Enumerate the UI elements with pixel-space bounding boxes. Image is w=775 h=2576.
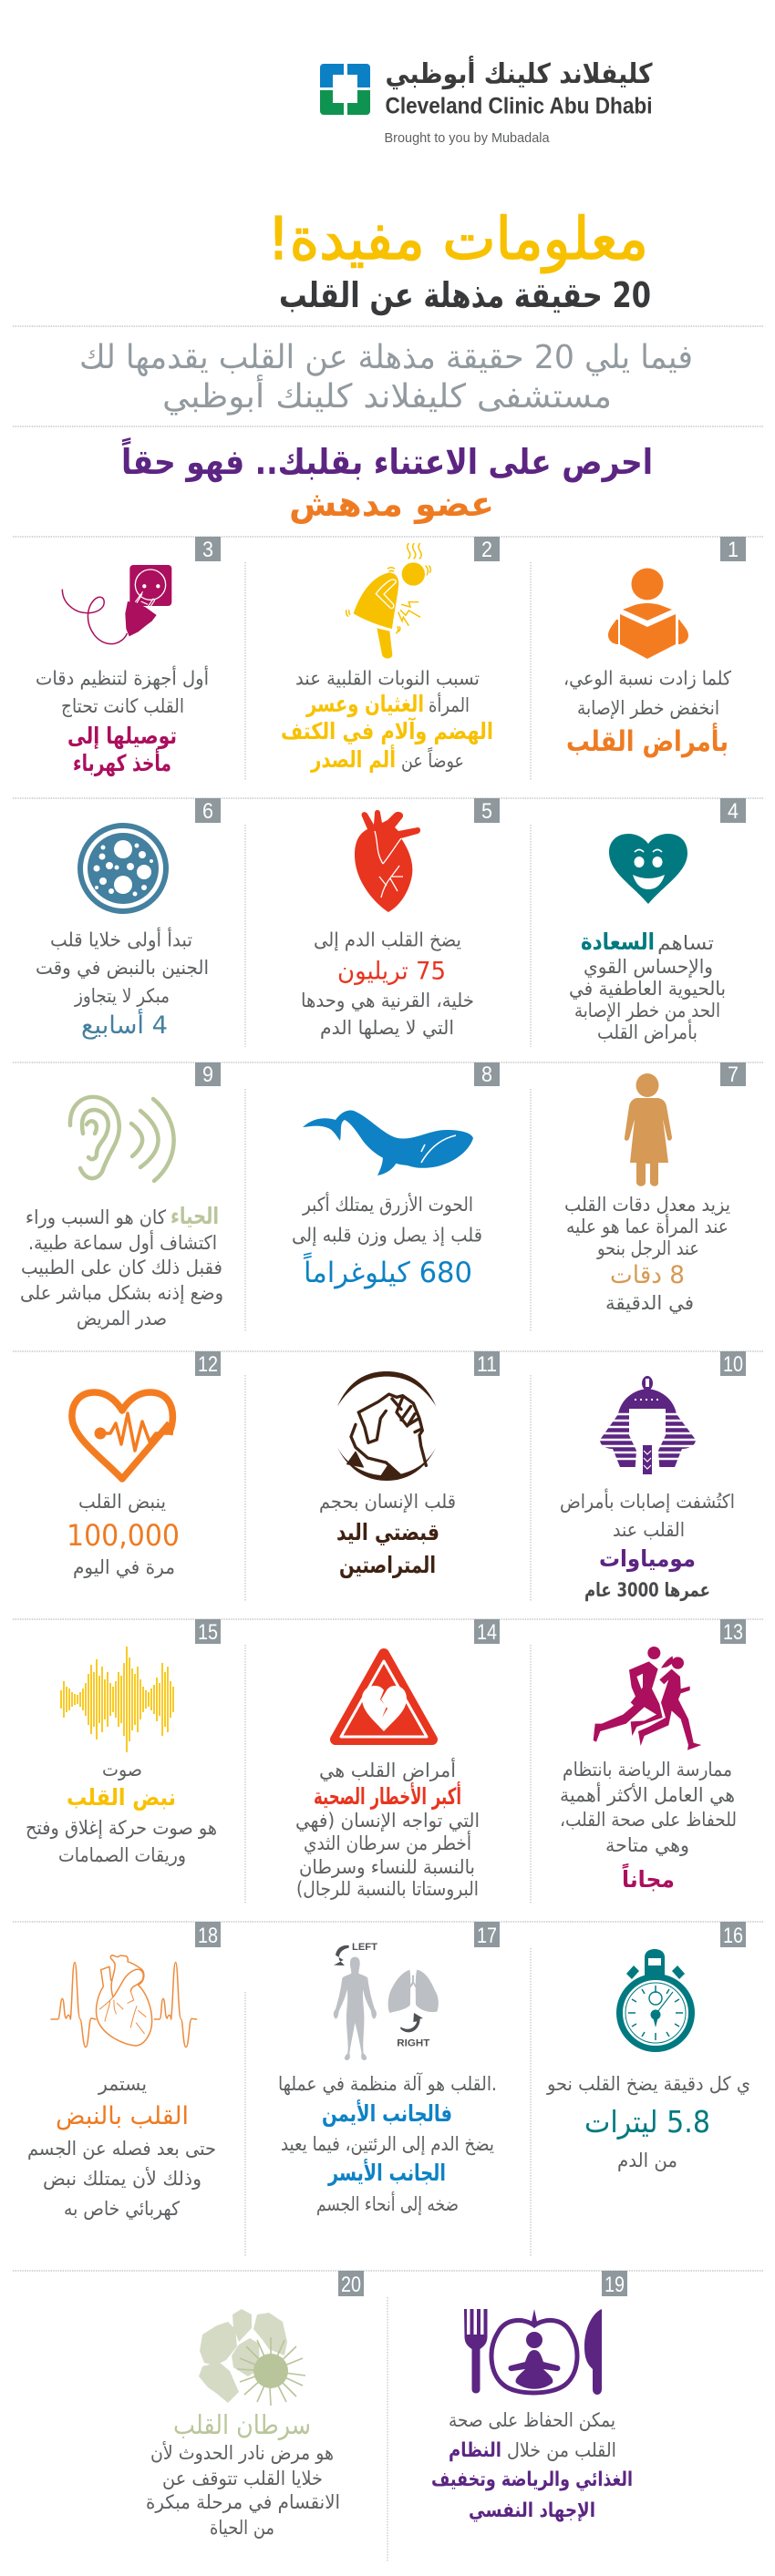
fact text: عمرها 3000 عام [584,1579,710,1601]
fact text [36,665,209,777]
number badge 7 [720,1062,746,1087]
fact text: السعادة [581,929,655,955]
icon: clasped fists [337,1371,436,1481]
fact text: فقبل ذلك كان على الطبيب [21,1257,222,1278]
number badge 5 [474,798,500,824]
icon: person reading [608,569,688,659]
fact text [560,1488,735,1601]
subtitle: 20 حقيقة مذهلة عن القلب [279,275,651,315]
number badge 4: 4 [728,799,739,824]
logo: Cleveland Clinic Abu Dhabi [320,56,653,146]
fact text: 100,000 [67,1518,180,1553]
icon: blue whale [303,1111,473,1175]
fact text: الجانب الأيسر [326,2159,446,2187]
fact text: مأخذ كهرباء [73,748,171,777]
headline: take care of your heart: احرص على الاعتناء بقلبك.. فهو حقاً [121,437,653,482]
intro text [79,339,693,416]
fact text: توصيلها إلى [67,723,177,750]
fact text: الانقسام في مرحلة مبكرة [146,2491,340,2513]
fact text: القلب كانت تحتاج [61,695,184,718]
panel: fact 14 [295,1619,500,1900]
logo English name: Cleveland Clinic Abu Dhabi [385,93,653,118]
fact text: للحفاظ على صحة القلب، [560,1809,737,1831]
number badge 11: 11 [477,1352,497,1377]
icon: body and lungs with left and right arrows [334,1942,439,2060]
number badge 3 [195,537,221,562]
fact text: النظام [449,2439,501,2462]
fact text: وذلك لأن يمتلك نبض [43,2167,202,2190]
fact text: يضخ الدم إلى الرئتين، فيما يعيد [281,2133,494,2156]
fact text [281,667,493,773]
fact text [278,2072,497,2216]
fact text: 8 دقات [610,1261,685,1289]
fact text [146,2409,340,2539]
number badge 16: 16 [723,1924,743,1948]
panel: fact 9 [20,1062,223,1329]
panel: fact 11 [319,1351,500,1579]
icon: ear with sound waves [70,1097,174,1181]
fact text: القلب بالنبض [56,2102,189,2130]
fact text: عند الرجل بنحو [596,1237,699,1259]
label: right: RIGHT [397,2038,429,2049]
icon: heart with pulse [72,1392,173,1479]
fact text [319,1491,456,1579]
panel: fact 7 [564,1062,746,1314]
fact text: ي كل دقيقة يضخ القلب نحو [546,2073,750,2095]
number badge 10: 10 [723,1352,743,1377]
fact text [569,929,726,1043]
fact text: خلايا القلب تتوقف عن [162,2468,323,2489]
fact text: الغذائي والرياضة وتخفيف [431,2468,633,2491]
fact text: ينبض القلب [78,1491,166,1513]
fact text: 5.8 ليترات [584,2104,710,2140]
fact text: الغثيان وعسر [305,691,424,718]
fact text: مبكر لا يتجاوز [74,985,170,1007]
number badge 1: 1 [728,538,739,562]
fact text: وريقات الصمامات [58,1844,186,1866]
fact text: بأمراض القلب [566,723,728,758]
fact text [67,1491,180,1578]
number badge 2 [474,537,500,562]
fact text: قبضتي اليد [336,1519,439,1545]
number badge 8 [474,1062,500,1087]
number badge 18: 18 [198,1924,218,1948]
fact text: اكتُشفت إصابات بأمراض [560,1488,735,1514]
fact text: الهضم وآلام في الكتف [281,717,493,745]
panel: fact 18 [27,1922,221,2220]
fact text: تساهم [657,932,714,955]
icon: line heart with ECG [51,1955,197,2047]
icon: embryo cells [80,826,166,911]
intro text: فيما يلي 20 حقيقة مذهلة عن القلب يقدمها لك [79,339,693,376]
icon: woman silhouette [625,1073,672,1186]
icon: logo cross mark [320,64,370,115]
fact text: صدر المريض [77,1308,167,1329]
icon: woman bent in pain [346,543,430,659]
number badge 19: 19 [604,2273,625,2297]
fact text: القلب هو آلة منظمة في عملها. [278,2072,497,2095]
fact text: القلب من خلال [507,2439,616,2461]
fact text: صوت [102,1759,142,1781]
number badge 7: 7 [728,1062,739,1087]
headline: amazing organ: عضو مدهش [289,484,494,524]
number badge 15: 15 [198,1620,218,1645]
icon: pharaoh mummy mask [597,1376,698,1476]
fact text: مجاناً [622,1863,675,1893]
number badge 6 [195,798,221,824]
icon: warning triangle with broken heart [336,1654,432,1740]
fact text: حتى بعد فصله عن الجسم [27,2138,216,2160]
title: معلومات مفيدة! [267,206,648,273]
fact text: الجنين بالنبض في وقت [36,957,209,979]
panel: fact 17 [278,1922,500,2216]
label: left: LEFT [352,1942,377,1953]
fact text: كلما زادت نسبة الوعي، [563,667,731,689]
number badge 8: 8 [481,1062,492,1087]
fact text: نبض القلب [67,1784,176,1811]
fact text: من الدم [617,2150,677,2171]
fact text: خلية، القرنية هي وحدها [301,990,474,1011]
icon: heart cancer cells [199,2309,305,2406]
panel: fact 6 [36,798,221,1040]
fact text [295,1758,480,1900]
number badge 13: 13 [723,1620,743,1645]
fact text: انخفض خطر الإصابة [577,697,719,719]
fact text [546,2073,750,2171]
number badge 2: 2 [481,538,492,562]
panel: fact 19 [431,2271,633,2522]
fact text: 4 أسابيع [81,1008,168,1040]
fact text [301,929,474,1039]
fact text: بالحيوية العاطفية في [569,978,726,1000]
fact text: الحياء [170,1203,219,1229]
number badge 4 [720,798,746,824]
fact text: التي تواجه الإنسان (فهي [295,1810,480,1832]
fact text: التي لا يصلها الدم [320,1017,454,1039]
fact text: المتراصتين [339,1552,436,1579]
number badge 17: 17 [477,1924,497,1948]
fact text: الحوت الأزرق يمتلك أكبر [302,1192,473,1216]
fact text [560,1759,737,1893]
number badge 6: 6 [202,799,213,824]
panel: fact 15 [26,1619,221,1866]
icon: stopwatch [620,1949,691,2048]
panel: fact 13 [560,1619,746,1893]
icon: fork, plate and knife with meditating figure [464,2309,602,2395]
number badge 3: 3 [202,538,213,562]
number badge 9 [195,1062,221,1087]
panel: fact 16 [546,1922,750,2171]
icon: two runners [594,1647,701,1750]
fact text [563,667,731,758]
arrow: left [334,1945,349,1965]
fact text: قلب الإنسان بحجم [319,1491,456,1514]
fact text: 75 تريليون [337,957,446,986]
fact text: أمراض القلب هي [319,1758,456,1781]
fact text: المرأة [429,693,470,716]
fact text: عوضاً عن [401,746,464,772]
panel: fact 20 [146,2271,364,2539]
panel: fact 10 [560,1351,746,1601]
fact text [292,1192,482,1289]
logo tagline: Brought to you by Mubadala [385,130,550,146]
panel: fact 5 [301,798,500,1039]
fact text: والإحساس القوي [584,956,713,978]
fact text: فالجانب الأيمن [322,2099,452,2128]
fact text: يمكن الحفاظ على صحة [449,2409,615,2431]
fact text: أكبر الأخطار الصحية [314,1781,461,1811]
fact text [26,1759,217,1866]
panel: fact 4 [569,798,746,1043]
panel: fact 2 [281,537,500,773]
fact text: البروستاتا بالنسبة للرجال) [296,1878,479,1900]
fact text: قلب إذ يصل وزن قلبه إلى [292,1225,482,1247]
fact text [20,1203,223,1329]
fact text: يزيد معدل دقات القلب [564,1194,730,1216]
fact text: كان هو السبب وراء [26,1206,166,1228]
number badge 12: 12 [198,1352,218,1377]
icon: plug and socket [62,565,171,644]
panel: fact 3 [36,537,221,777]
fact text [564,1194,730,1314]
fact text: مومياوات [599,1545,696,1573]
fact text: من الحياة [210,2517,274,2539]
icon: anatomical heart [355,810,420,912]
fact text: بالنسبة للنساء وسرطان [299,1856,475,1878]
intro text: مستشفى كليفلاند كلينك أبوظبي [162,375,612,416]
fact text: القلب عند [613,1519,685,1541]
icon: heartbeat sound wave [61,1647,173,1752]
icon: lungs [388,1970,439,2013]
fact text: يستمر [98,2073,147,2095]
fact text: سرطان القلب [173,2409,311,2440]
fact text: هي العامل الأكثر أهمية [560,1782,735,1806]
number badge 1 [720,537,746,562]
number badge 14: 14 [477,1620,497,1645]
fact text: كهربائي خاص به [64,2198,180,2220]
fact text: اكتشاف أول سماعة طبية. [28,1230,217,1254]
number badge 5: 5 [481,799,492,824]
panel: fact 1 [563,537,746,758]
number badge 20: 20 [341,2273,361,2297]
fact text: ضخه إلى أنحاء الجسم [316,2191,459,2216]
arrow: right [400,2013,423,2032]
fact text: عند المرأة عما هو عليه [566,1214,728,1237]
fact text: الإجهاد النفسي [469,2499,595,2522]
number badge 9: 9 [202,1062,213,1087]
fact text: تسبب النوبات القلبية عند [295,667,480,689]
fact text [36,928,209,1040]
fact text: هو مرض نادر الحدوث لأن [150,2441,334,2464]
fact text: الحد من خطر الإصابة [574,1000,720,1021]
fact text: في الدقيقة [605,1292,694,1314]
fact text [431,2409,633,2522]
panel: fact 8 [292,1062,500,1289]
fact text: مرة في اليوم [73,1556,175,1578]
fact text: هو صوت حركة إغلاق وفتح [26,1817,217,1840]
fact text: وهي متاحة [605,1834,689,1856]
fact text: أخطر من سرطان الثدي [304,1831,471,1854]
fact text: ممارسة الرياضة بانتظام [563,1759,732,1781]
icon: human body [334,1957,377,2060]
fact text: أول أجهزة لتنظيم دقات [36,665,209,691]
fact text: وضع إذنه بشكل مباشر على [20,1282,223,1305]
panel: fact 12 [67,1351,221,1578]
fact text [27,2073,216,2220]
fact text: يضخ القلب الدم إلى [314,929,461,951]
fact text: ألم الصدر [309,744,396,773]
fact text: 680 كيلوغراماً [304,1252,472,1289]
fact text: بأمراض القلب [597,1019,698,1043]
fact text: تبدأ أولى خلايا قلب [50,928,192,951]
logo Arabic name: كليفلاند كلينك أبوظبي [385,56,653,90]
icon: smiling heart [609,834,687,904]
